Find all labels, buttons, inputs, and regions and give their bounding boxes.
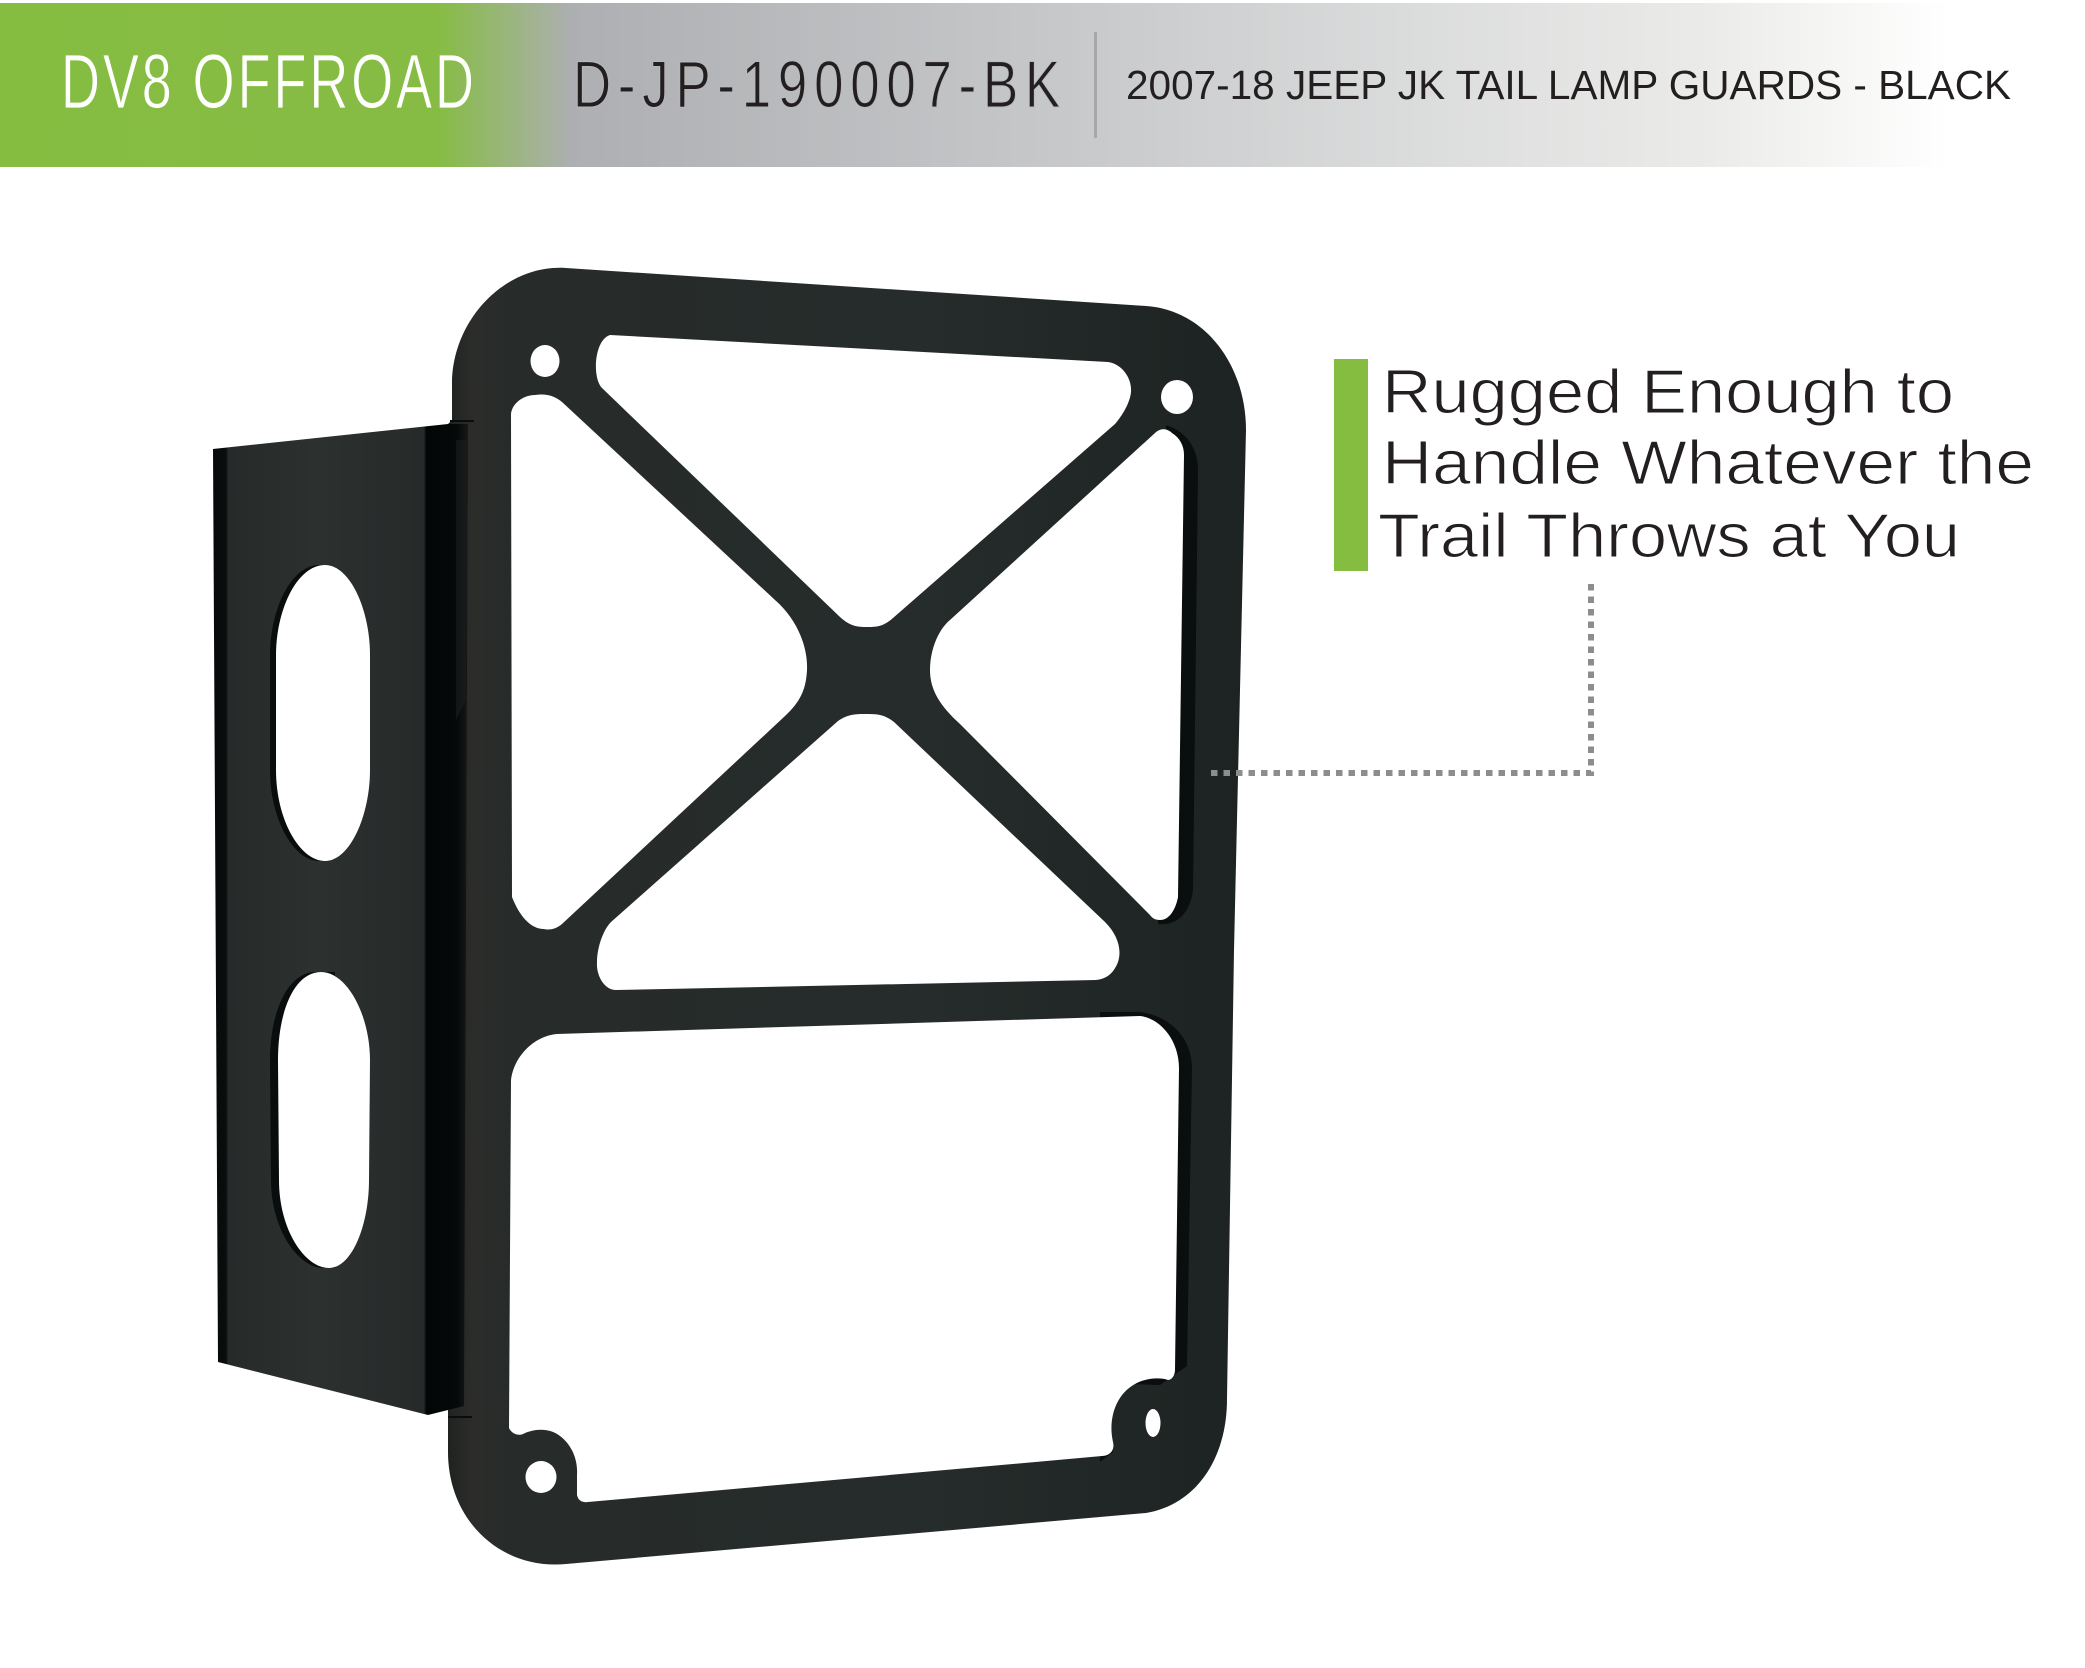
bracket oval slot upper rim — [270, 565, 330, 861]
callout text: Handle Whatever the — [1382, 429, 2034, 498]
bolt hole bottom right — [1146, 1409, 1160, 1437]
product: tail lamp guard — [213, 268, 1246, 1564]
bracket oval slot lower rim — [270, 972, 335, 1268]
right window inner shadow — [1158, 425, 1198, 924]
bolt hole bottom left — [526, 1461, 556, 1493]
bracket oval slot lower — [278, 972, 370, 1268]
callout text: Trail Throws at You — [1378, 502, 1960, 571]
notch bottom — [448, 1416, 472, 1418]
bolt hole top left — [530, 345, 560, 377]
notch top — [450, 420, 474, 422]
callout green accent bar — [1334, 359, 1368, 571]
dotted leader line — [1211, 584, 1591, 773]
side mounting bracket — [213, 424, 468, 1415]
lower triangle window — [597, 714, 1119, 990]
header divider — [1094, 32, 1097, 138]
right window — [930, 429, 1184, 920]
callout text: Rugged Enough to — [1382, 358, 1954, 427]
bracket oval slot upper — [276, 565, 370, 861]
product title: 2007-18 JEEP JK TAIL LAMP GUARDS - BLACK — [1126, 62, 2011, 108]
brand name: DV8 OFFROAD — [61, 40, 474, 125]
header banner — [0, 3, 2085, 167]
bolt hole top right — [1161, 380, 1193, 414]
header gradient bar — [0, 3, 2085, 167]
part number: D-JP-190007-BK — [573, 47, 1060, 121]
guard face plate — [448, 268, 1246, 1564]
left window — [511, 394, 807, 929]
bend highlight — [456, 440, 468, 720]
callout: rugged trail — [1334, 358, 2034, 571]
callout text — [1378, 358, 2034, 571]
large window inner shadow — [1100, 1012, 1192, 1462]
large lower window — [509, 1016, 1179, 1502]
top window — [596, 335, 1131, 627]
